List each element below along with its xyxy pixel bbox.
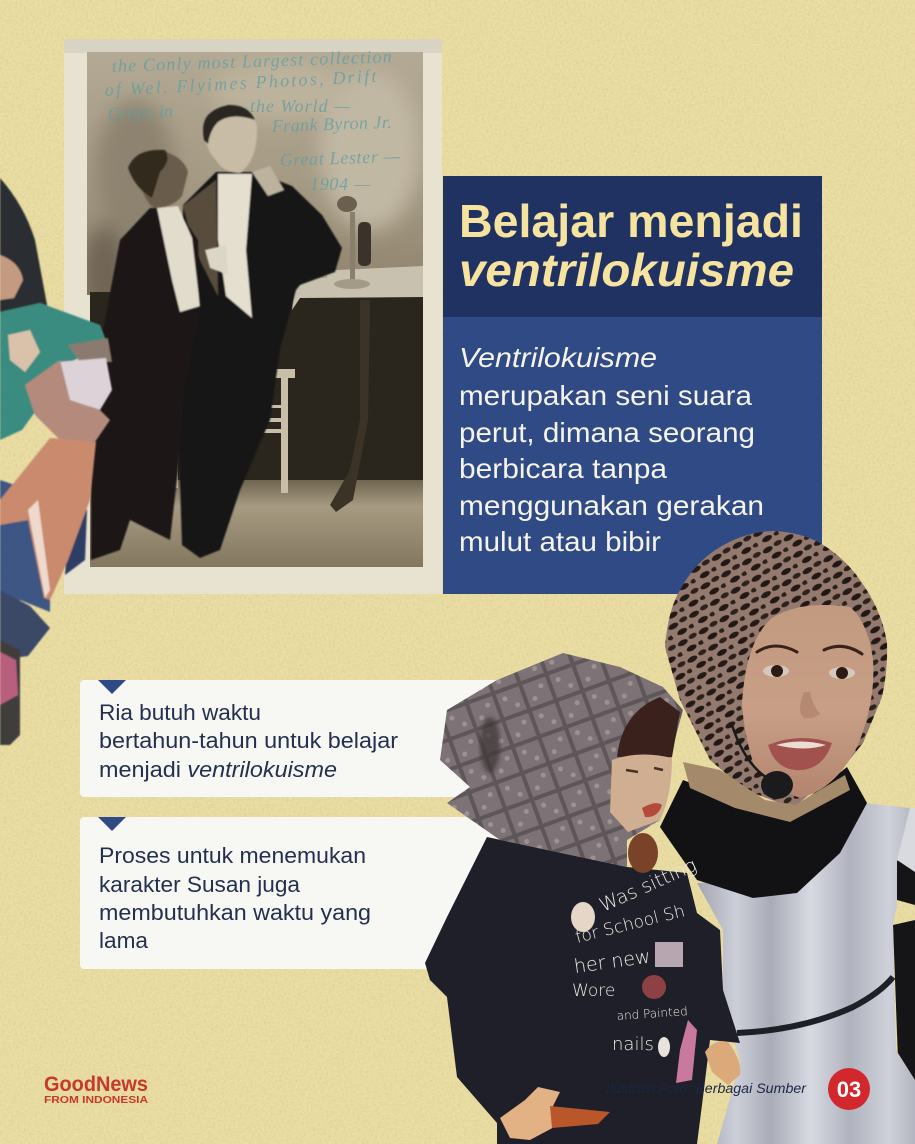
nose: [800, 692, 820, 718]
beige neck scarf fold: [683, 762, 850, 822]
description text: berbicara tanpa: [459, 453, 667, 484]
callout card 1: bertahun-tahun untuk belajar: [99, 728, 399, 753]
white forearm: [58, 358, 112, 410]
sweater handwriting: Was sitting: [596, 854, 700, 917]
doll lips: [642, 803, 662, 817]
description text: perut, dimana seorang: [459, 417, 755, 448]
logo GoodNews: FROM INDONESIA: [44, 1094, 148, 1106]
callout card 2: lama: [99, 928, 148, 953]
callout card 1: [80, 680, 510, 797]
callout card 2: Proses untuk menemukan: [99, 843, 366, 868]
gray patterned hijab: [440, 653, 683, 867]
mouth: [768, 738, 832, 770]
chair: [112, 351, 295, 493]
orange garment detail: [550, 1106, 610, 1128]
pale hand: [8, 330, 40, 372]
sweater handwriting: [572, 854, 700, 1055]
callout card 2: [80, 817, 500, 969]
page number badge: 03: [837, 1077, 861, 1102]
card marker: [98, 680, 126, 694]
black sweater: [425, 837, 740, 1144]
dress belt: [737, 977, 893, 1033]
black side detail: [893, 850, 915, 1080]
description text: menggunakan gerakan: [459, 490, 764, 521]
title panel: [443, 176, 822, 317]
sweater handwriting: and Painted: [616, 1004, 688, 1023]
hijab shadow: [480, 717, 500, 773]
handwritten inscription: [104, 46, 401, 194]
floor: [90, 480, 423, 567]
description text: mulut atau bibir: [459, 526, 661, 557]
doll hair: [617, 697, 680, 757]
dark background under table: [90, 292, 423, 490]
doll hands: [705, 1041, 740, 1085]
headset microphone: [732, 725, 793, 799]
handwritten inscription: 1904 —: [310, 174, 371, 194]
description text: [459, 342, 764, 557]
handwritten inscription: Great Lester —: [279, 146, 401, 170]
title panel: ventrilokuisme: [459, 244, 794, 296]
sweater handwriting: Wore: [572, 981, 615, 1001]
page number badge: [828, 1068, 870, 1110]
left doll held at the page edge: [0, 178, 112, 745]
shoe: [0, 640, 20, 745]
logo GoodNews: [44, 1073, 148, 1106]
face: [742, 605, 873, 798]
title text: Belajar menjadi: [459, 195, 803, 247]
callout card 1: Ria butuh waktu: [99, 700, 261, 725]
doll Susan: [425, 653, 740, 1144]
ventriloquist man: [178, 105, 342, 558]
sweater handwriting: her new: [573, 945, 652, 978]
flower brooch: [628, 833, 658, 873]
small figures on sweater: [571, 902, 697, 1083]
photo credit: Ilustrasi Foto: Berbagai Sumber: [606, 1081, 807, 1096]
sweater handwriting: for School Sh: [573, 901, 687, 948]
orange hand: [0, 438, 96, 600]
description text: Ventrilokuisme: [459, 342, 657, 373]
black neck scarf: [660, 767, 867, 898]
callout card 2: karakter Susan juga: [99, 872, 300, 897]
handwritten inscription: Grojo, in: [107, 101, 173, 124]
teal patterned shirt: [0, 303, 108, 440]
wooden dummy: [91, 150, 228, 560]
leopard hijab: [665, 531, 887, 808]
handwritten inscription: the World —: [250, 96, 351, 116]
silver dress: [697, 803, 915, 1144]
description text: merupakan seni suara: [459, 380, 752, 411]
vintage photo of ventriloquist with dummy, 1904: [64, 39, 442, 594]
handwritten inscription: of Wel. Flyimes Photos, Drift: [104, 66, 378, 100]
doll hood: [0, 178, 48, 320]
sleeve trim: [68, 338, 112, 362]
woman ventriloquist (Ria): [660, 531, 915, 1144]
eyebrows: [757, 646, 862, 654]
handwritten inscription: the Conly most Largest collection: [111, 46, 392, 76]
handwritten inscription: Frank Byron Jr.: [270, 112, 392, 136]
doll face: [0, 255, 23, 300]
eyes: [763, 665, 855, 679]
jeans: [0, 480, 50, 612]
jeans cuff: [0, 590, 50, 660]
logo GoodNews: GoodNews: [44, 1073, 148, 1096]
callout card 2: membutuhkan waktu yang: [99, 900, 371, 925]
telephone: [315, 196, 371, 289]
sweater handwriting: nails: [612, 1034, 654, 1055]
description panel: [443, 317, 822, 594]
table: [292, 266, 423, 512]
callout card 1: menjadi ventrilokuisme: [99, 757, 337, 782]
doll face: [610, 754, 672, 832]
card marker: [98, 817, 126, 831]
